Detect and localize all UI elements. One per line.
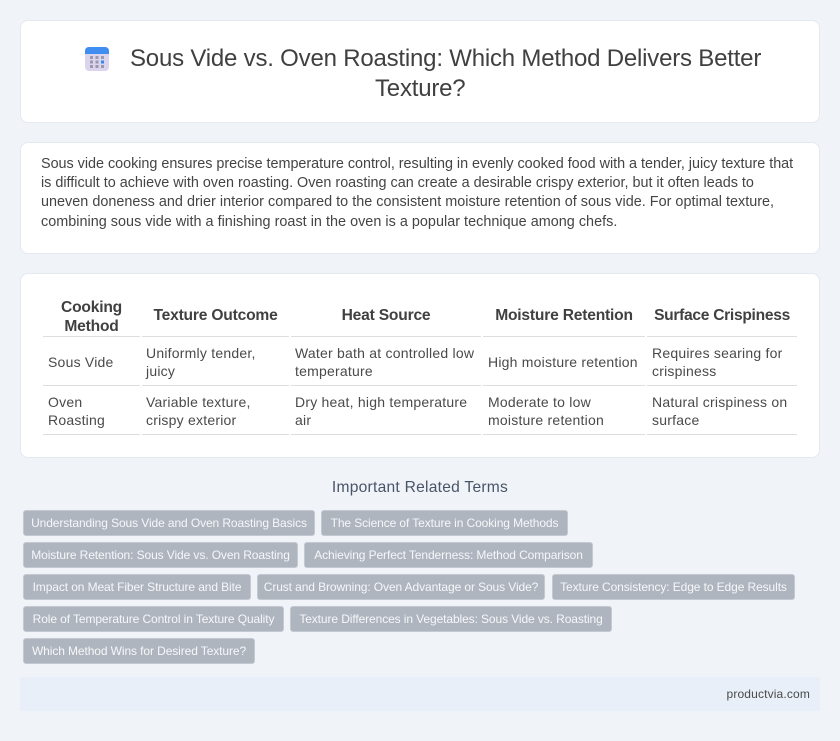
tag: Understanding Sous Vide and Oven Roasting Basics (31, 516, 307, 530)
title: Sous Vide vs. Oven Roasting: Which Method Delivers Better (130, 45, 761, 72)
table row: oven roasting: Dry heat, high temperature (295, 394, 467, 410)
heading: related terms: Important Related Terms (332, 479, 508, 496)
table row: sous vide: Uniformly tender, (146, 345, 256, 361)
table row: sous vide: juicy (146, 363, 175, 379)
tag (257, 574, 545, 600)
table row: sous vide (48, 345, 782, 379)
table header: Moisture Retention (495, 307, 633, 324)
table row: oven roasting: Moderate to low (488, 394, 591, 410)
tag (23, 510, 315, 536)
text block: introduction: Sous vide cooking ensures precise temperature control, resulting in evenly cooked food with a tender, juicy texture that (41, 156, 793, 172)
table header: Method (64, 318, 119, 335)
tag: The Science of Texture in Cooking Methods (331, 516, 558, 530)
table header: Surface Crispiness (654, 307, 790, 324)
table header (61, 299, 790, 335)
tag list: related terms (23, 510, 795, 664)
table row: oven roasting: air (295, 412, 311, 428)
tag: Role of Temperature Control in Texture Quality (33, 612, 274, 626)
text block: introduction: uneven doneness and drier interior compared to the consistent moisture retention of sous vide. For optimal texture, (41, 194, 774, 210)
table row: sous vide: Sous Vide (48, 354, 114, 370)
panel: title header (20, 20, 820, 123)
tag (23, 638, 255, 664)
table row: oven roasting: crispy exterior (146, 412, 236, 428)
table row: oven roasting: surface (652, 412, 699, 428)
table row: sous vide: crispiness (652, 363, 716, 379)
tag: Achieving Perfect Tenderness: Method Comparison (314, 548, 583, 562)
tag (552, 574, 795, 600)
table header: Heat Source (342, 307, 430, 324)
table row: oven roasting: Variable texture, (146, 394, 251, 410)
text block: introduction: is difficult to achieve with oven roasting. Oven roasting can create a desirable crispy exterior, but it often leads to (41, 175, 754, 191)
table row: sous vide: temperature (295, 363, 373, 379)
footer text: site name: productvia.com (727, 687, 810, 701)
tag: Texture Differences in Vegetables: Sous Vide vs. Roasting (299, 612, 603, 626)
tag (290, 606, 612, 632)
tag (23, 574, 251, 600)
tag: Crust and Browning: Oven Advantage or Sous Vide? (264, 580, 538, 594)
icon: calendar (85, 47, 109, 71)
tag: Texture Consistency: Edge to Edge Results (560, 580, 787, 594)
table row: oven roasting: Natural crispiness on (652, 394, 787, 410)
table row: oven roasting: Oven (48, 394, 82, 410)
tag: Impact on Meat Fiber Structure and Bite (33, 580, 241, 594)
table row: oven roasting: moisture retention (488, 412, 604, 428)
tag (23, 542, 298, 568)
table header: Texture Outcome (153, 307, 278, 324)
title (130, 45, 761, 102)
tag: Moisture Retention: Sous Vide vs. Oven Roasting (31, 548, 290, 562)
panel: comparison table (20, 273, 820, 458)
text block: introduction: combining sous vide with a finishing roast in the oven is a popular technique among chefs. (41, 214, 617, 230)
title: Texture? (375, 75, 465, 102)
footer bar (20, 677, 820, 711)
text block: introduction (41, 156, 794, 230)
table row: oven roasting (48, 394, 787, 428)
tag (304, 542, 593, 568)
panel: introduction (20, 142, 820, 254)
table header: Cooking (61, 299, 122, 316)
tag (321, 510, 568, 536)
table row: sous vide: High moisture retention (488, 354, 638, 370)
table row: sous vide: Water bath at controlled low (295, 345, 474, 361)
table row: sous vide: Requires searing for (652, 345, 782, 361)
tag (23, 606, 284, 632)
tag: Which Method Wins for Desired Texture? (32, 644, 246, 658)
table row: oven roasting: Roasting (48, 412, 105, 428)
